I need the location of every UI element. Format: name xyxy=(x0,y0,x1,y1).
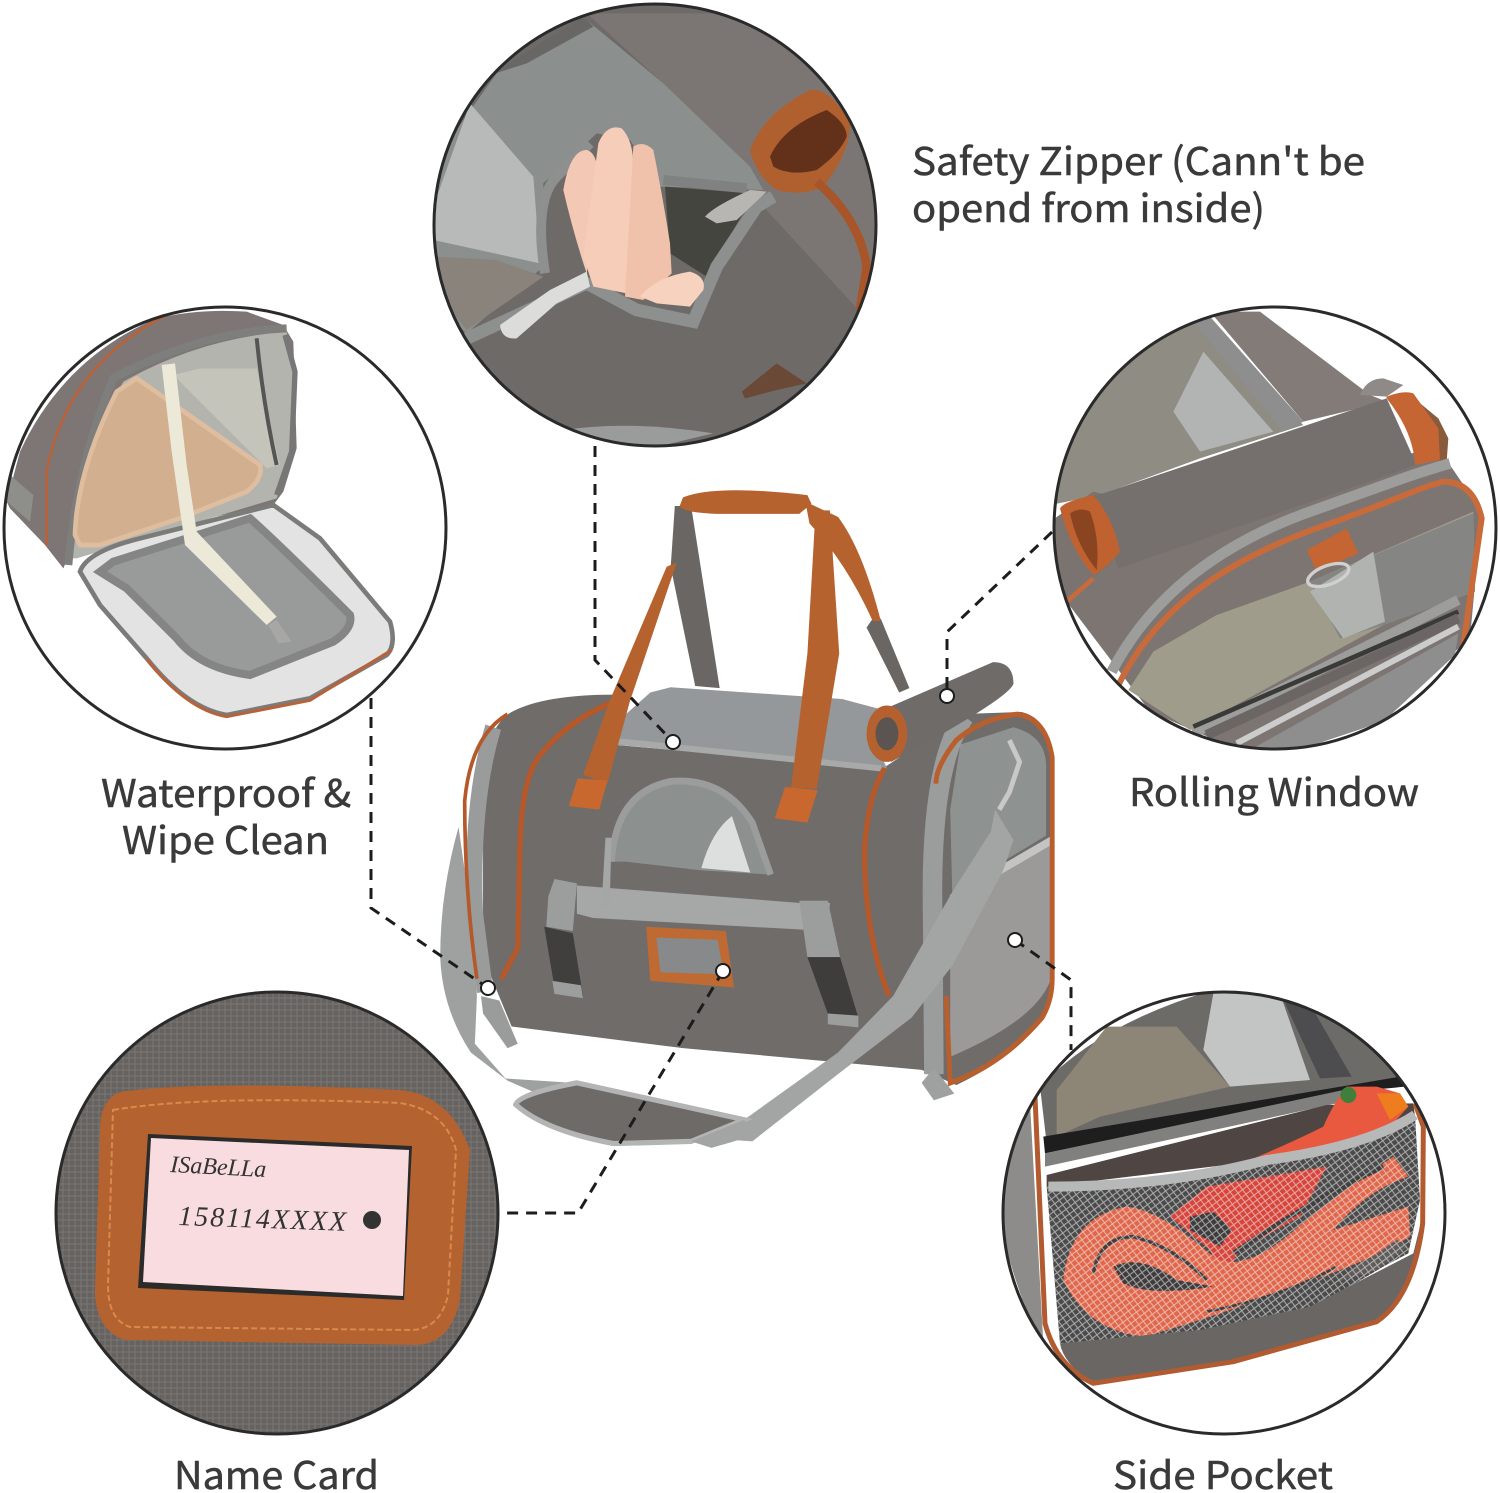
leather tag xyxy=(95,1085,470,1345)
panel: side pocket photo xyxy=(1000,990,1445,1434)
side panel xyxy=(922,714,1052,1085)
left zipper band xyxy=(474,727,493,992)
connector: waterproof xyxy=(371,698,488,988)
name tag xyxy=(646,927,734,987)
rolled window xyxy=(873,662,1013,762)
connector dots xyxy=(481,689,1022,995)
bag body xyxy=(483,695,1052,1085)
bag illustration xyxy=(440,490,1052,1148)
leather roll interior xyxy=(770,110,847,173)
strap over pad xyxy=(691,1120,756,1148)
connector: side pocket xyxy=(1015,940,1071,1050)
label: safety zipper: Safety Zipper (Cann't be xyxy=(912,131,1365,186)
panel: safety zipper photo xyxy=(430,0,880,450)
shoulder strap xyxy=(691,810,1013,1141)
handwritten name: ISaBeLLa xyxy=(169,1152,267,1183)
zipper pull: right xyxy=(705,190,767,223)
label: waterproof: Waterproof & xyxy=(101,763,351,818)
mesh pocket xyxy=(1047,1115,1420,1343)
orange piping xyxy=(1035,1097,1423,1383)
leather handles xyxy=(680,490,811,514)
white strap xyxy=(162,363,277,625)
webbing strap and buckles xyxy=(577,886,830,931)
hand xyxy=(563,127,704,307)
right back handle xyxy=(867,619,909,693)
connector: name card xyxy=(505,971,723,1213)
label: waterproof xyxy=(101,763,351,865)
connector: safety zipper xyxy=(595,446,673,742)
fabric base xyxy=(1060,1223,1421,1385)
panel: rolling window photo xyxy=(1050,307,1496,755)
label: waterproof: Wipe Clean xyxy=(122,810,329,865)
D ring xyxy=(1306,562,1350,588)
rolled window xyxy=(1102,398,1412,556)
gray back strap xyxy=(671,506,720,688)
shoulder pad xyxy=(516,1083,744,1144)
label: rolling window: Rolling Window xyxy=(1129,762,1419,817)
panel: name card photo xyxy=(50,990,500,1440)
orange tab xyxy=(1307,528,1358,572)
panel: waterproof photo xyxy=(4,307,446,749)
connector: rolling window xyxy=(947,532,1052,695)
handwritten number: 158114XXXX xyxy=(178,1201,348,1238)
label: safety zipper xyxy=(912,131,1365,233)
front window xyxy=(612,783,771,875)
frame body xyxy=(1067,452,1482,755)
left shoulder strap xyxy=(440,827,573,1100)
leather roll end xyxy=(750,90,850,193)
toy xyxy=(1254,1086,1408,1158)
piping xyxy=(501,703,610,979)
top mesh panel xyxy=(614,687,887,768)
card xyxy=(138,1134,412,1300)
label: safety zipper: opend from inside) xyxy=(912,178,1265,233)
zipper pull xyxy=(481,996,518,1048)
card punch hole xyxy=(363,1211,381,1229)
tray xyxy=(80,505,393,715)
snap hook xyxy=(999,740,1020,810)
beige pad xyxy=(75,378,261,545)
zipper pull: left xyxy=(500,272,590,338)
